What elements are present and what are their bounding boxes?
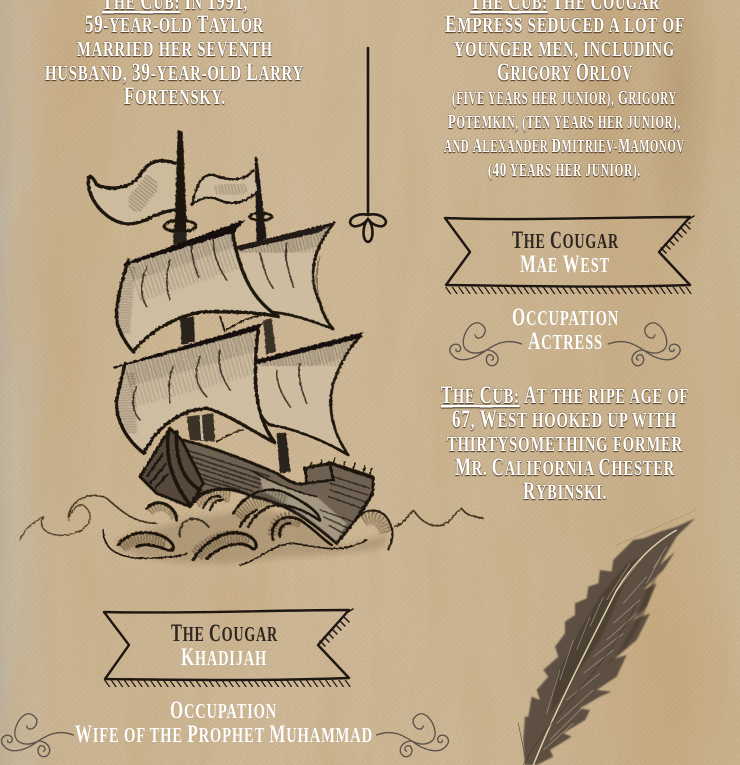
text block: Empress cub: GRIGORY ORLOV: [497, 59, 633, 86]
rear mast: [255, 157, 267, 242]
text block: Empress cub: (40 YEARS HER JUNIOR).: [488, 159, 641, 181]
wave shading: [117, 509, 390, 563]
text block: Taylor cub: MARRIED HER SEVENTH: [77, 37, 273, 61]
banner text: THE COUGAR: [512, 227, 619, 254]
divider: hanging line with knot: [350, 48, 386, 242]
illustration: feather quill: [518, 510, 697, 765]
flourishes: Actress: [450, 323, 680, 366]
waves: [20, 489, 483, 565]
text block: Empress cub: AND ALEXANDER DMITRIEV-MAMONOV: [444, 135, 685, 157]
upper yard: [123, 222, 242, 265]
text block: West cub: MR. CALIFORNIA CHESTER: [455, 454, 675, 481]
text block: West cub: RYBINSKI.: [523, 478, 607, 505]
upper left sail: [117, 228, 278, 352]
quill shaft: [533, 530, 677, 765]
occupation: Actress: OCCUPATION: [512, 304, 619, 331]
banner text: THE COUGAR: [171, 620, 278, 647]
occupation: wife of the prophet: [75, 697, 373, 748]
illustration: sailing ship: [20, 130, 483, 565]
banner: Khadijah: KHADIJAH: [181, 644, 267, 671]
text block: Taylor cub: [45, 0, 304, 110]
text block: Empress cub: (FIVE YEARS HER JUNIOR), GRIGORY: [452, 87, 677, 109]
main mast: [173, 130, 187, 243]
text block: Taylor cub: HUSBAND, 39-YEAR-OLD LARRY: [45, 59, 304, 86]
upper right sail: [233, 223, 334, 329]
occupation: wife of the prophet: WIFE OF THE PROPHET MUHAMMAD: [75, 721, 373, 748]
lower masts: [187, 413, 215, 442]
flourishes: Khadijah: [2, 714, 448, 757]
lower left sail: [116, 330, 275, 453]
crow nests: [164, 220, 196, 232]
occupation: wife of the prophet: OCCUPATION: [170, 697, 277, 724]
wave crest hatching: [122, 496, 387, 555]
text block: Empress cub: [444, 0, 685, 181]
banner: Khadijah: [104, 609, 353, 684]
banner: Mae West: [445, 216, 694, 290]
hull: [182, 440, 373, 543]
hull bow: [140, 428, 203, 507]
text block: Taylor cub: FORTENSKY.: [124, 83, 226, 110]
occupation: Actress: ACTRESS: [528, 328, 603, 355]
banner: Mae West: MAE WEST: [520, 251, 610, 278]
text block: West cub: [441, 382, 689, 505]
sail folds: [133, 240, 307, 420]
light barbs: [543, 547, 667, 750]
flag rear: [192, 170, 257, 205]
flag front: [88, 161, 175, 224]
text block: Taylor cub: 59-YEAR-OLD TAYLOR: [85, 11, 264, 38]
dark vane: [550, 557, 643, 713]
occupation: Actress: [512, 304, 619, 355]
upper masts: [180, 317, 195, 345]
lower yards: [113, 324, 262, 368]
lower right sail: [253, 336, 361, 455]
